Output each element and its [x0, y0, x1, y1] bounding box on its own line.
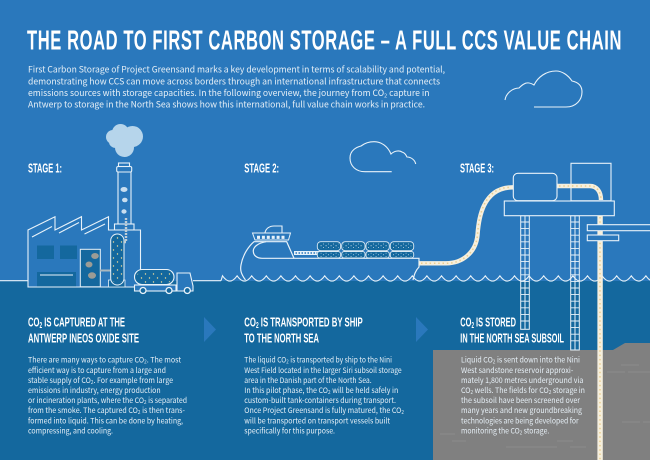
- column 2 text: IS TRANSPORTED BY SHIP: [259, 315, 363, 330]
- column 3 text: West sandstone reservoir approxi-: [461, 365, 574, 376]
- column 2 text: specifically for this purpose.: [244, 425, 335, 436]
- connector pipe: [100, 270, 110, 272]
- smoke cloud: [106, 124, 143, 157]
- column 3 text: Liquid CO: [461, 355, 495, 366]
- column 1 text: from the smoke. The captured CO: [28, 405, 146, 416]
- intro text: [28, 63, 445, 110]
- column 2 text: area in the Danish part of the North Sea.: [244, 375, 372, 386]
- column 3 text: 2: [493, 359, 496, 366]
- absorber tower: [111, 234, 124, 285]
- column 2 text: 2: [286, 359, 289, 366]
- stage 2 label: STAGE 2:: [244, 160, 279, 175]
- column 3 text: 2: [549, 389, 552, 396]
- column 1 text: 2: [91, 379, 94, 386]
- side platforms: [587, 225, 650, 231]
- ship: [241, 226, 419, 280]
- leg left: [521, 216, 529, 329]
- intro text: Antwerp to storage in the North Sea shows how this international, full value chain works in practice.: [28, 98, 425, 110]
- seabed subsoil: [433, 343, 650, 460]
- arrow 2: [416, 317, 428, 342]
- intro text: emissions sources with storage capacities. In the following overview, the journey from CO: [28, 86, 387, 99]
- leg right: [571, 216, 579, 350]
- icon: cloud middle: [350, 142, 416, 172]
- column 3 text: CO: [460, 315, 480, 330]
- column 3 text: 2: [471, 321, 474, 330]
- truck: [134, 270, 193, 294]
- column 2 text: West Field located in the larger Siri subsoil storage: [244, 365, 402, 376]
- column 1 text: 2: [138, 409, 141, 416]
- column 1 text: . The most: [147, 355, 181, 366]
- column 2 text: Once Project Greensand is fully matured, the CO: [244, 405, 413, 416]
- column 3 text: CO: [461, 385, 471, 396]
- column 2 text: is transported by ship to the Nini: [289, 355, 392, 366]
- column 1 text: is separated: [147, 395, 187, 406]
- column 1 text: formed into liquid. This can be done by heating,: [28, 415, 183, 426]
- stage 3 label: STAGE 3:: [460, 160, 494, 175]
- column 2 text: In this pilot phase, the CO: [244, 385, 334, 396]
- pipe to well: [557, 186, 601, 200]
- column 2 text: custom-built tank-containers during transport.: [244, 395, 396, 406]
- column 2 text: TO THE NORTH SEA: [244, 331, 319, 346]
- column 1 text: CO: [28, 315, 48, 330]
- column 1 text: 2: [144, 359, 147, 366]
- column 1 text: . For example from large: [93, 375, 173, 386]
- column 3 text: 2: [520, 429, 522, 436]
- column 2 text: CO: [244, 315, 264, 330]
- gas pipe to chimney: [123, 218, 126, 242]
- column 3 text: many years and new groundbreaking: [461, 405, 583, 416]
- column 3 text: [460, 315, 585, 436]
- column 3 text: mately 1,800 metres underground via: [461, 375, 583, 386]
- column 3 text: storage in: [551, 385, 585, 396]
- column 1 text: [28, 315, 187, 436]
- well pipe: [597, 216, 603, 460]
- process module: [513, 173, 557, 201]
- column 1 text: 2: [39, 321, 42, 330]
- tall box: [571, 163, 611, 201]
- pipeline ship to platform: [419, 187, 513, 263]
- column 2 text: will be transported on transport vessels built: [244, 415, 390, 426]
- column 3 text: is sent down into the Nini: [495, 355, 580, 366]
- column 1 text: IS CAPTURED AT THE: [42, 315, 125, 330]
- column 1 text: is then trans-: [140, 405, 185, 416]
- column 3 text: 2: [471, 389, 473, 396]
- column 3 text: IN THE NORTH SEA SUBSOIL: [460, 331, 564, 346]
- column 2 text: 2: [256, 321, 259, 330]
- column 3 text: IS STORED: [474, 315, 516, 330]
- factory illustration: [28, 163, 140, 287]
- arrow 1: [204, 317, 216, 342]
- column 3 text: wells. The fields for CO: [473, 385, 549, 396]
- tower base: [108, 280, 125, 287]
- deck: [504, 201, 614, 216]
- horizon line left: [0, 280, 221, 282]
- intro text: First Carbon Storage of Project Greensand marks a key development in terms of scalability and potential,: [28, 63, 445, 76]
- windows: [37, 246, 77, 259]
- deck rail: [294, 251, 319, 255]
- superstructure curve: [253, 242, 294, 258]
- column 2 text: 2: [401, 409, 404, 416]
- chimney: [114, 163, 134, 230]
- column 1 text: or incineration plants, where the CO: [28, 395, 155, 406]
- column 2 text: 2: [328, 389, 331, 396]
- bridge: [252, 226, 290, 240]
- capture unit: [80, 249, 100, 287]
- icon: cloud top right: [505, 71, 582, 107]
- containers: [317, 242, 414, 258]
- intro text: 2: [384, 91, 387, 99]
- building: [28, 217, 140, 287]
- column 1 text: There are many ways to capture CO: [28, 355, 152, 366]
- column 2 text: [244, 315, 404, 436]
- column 3 text: the subsoil have been screened over: [461, 395, 580, 406]
- column 1 text: stable supply of CO: [28, 375, 96, 386]
- sea: [0, 281, 650, 460]
- stage 1 label: STAGE 1:: [28, 160, 62, 175]
- column 3 text: monitoring the CO: [461, 425, 526, 436]
- waves: [221, 276, 650, 281]
- column 3 text: technologies are being developed for: [461, 415, 579, 426]
- column 1 text: compressing, and cooling.: [28, 425, 113, 436]
- intro text: capture in: [387, 86, 430, 99]
- platform: [504, 163, 650, 460]
- column 2 text: will be held safely in: [331, 385, 398, 396]
- column 3 text: storage.: [522, 425, 549, 436]
- sky background: [0, 0, 650, 282]
- hull: [241, 242, 419, 280]
- column 1 text: 2: [144, 399, 147, 406]
- column 1 text: efficient way is to capture from a large and: [28, 365, 166, 376]
- column 1 text: ANTWERP INEOS OXIDE SITE: [28, 331, 139, 346]
- intro text: demonstrating how CCS can move across borders through an international infrastructure that connects: [28, 74, 440, 87]
- door: [37, 272, 76, 286]
- column 1 text: emissions in industry, energy production: [28, 385, 161, 396]
- column 2 text: The liquid CO: [244, 355, 292, 366]
